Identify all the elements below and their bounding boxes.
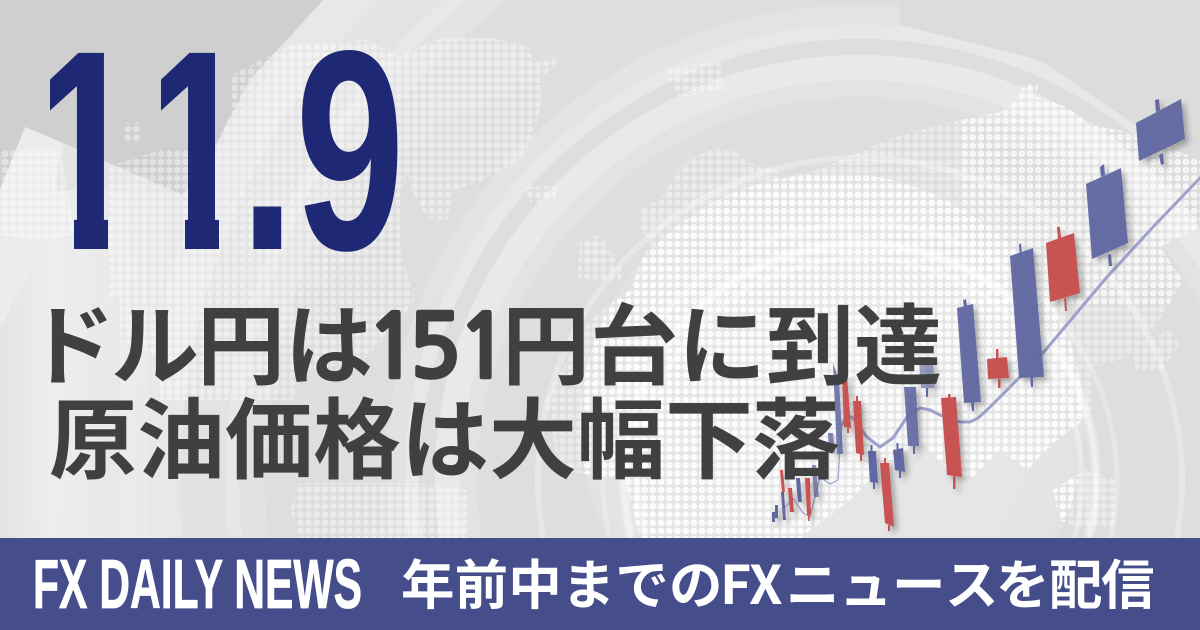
- footer bar: [0, 538, 1200, 630]
- brand label: FX DAILY NEWS: [33, 545, 362, 623]
- blue candles: [772, 99, 1185, 522]
- footer tagline: 年前中までのFXニュースを配信: [401, 543, 1154, 620]
- headline line 1: 151: [366, 304, 510, 392]
- dotted world map: [0, 38, 1200, 538]
- red candles: [780, 227, 1080, 531]
- globe highlight: [718, 312, 944, 538]
- headline line 2: 原油価格は大幅下落: [49, 370, 840, 498]
- main headline: [27, 276, 942, 498]
- chart: candlesticks with trend line: [772, 99, 1200, 531]
- headline line 1: 円台に到達: [502, 276, 942, 404]
- trend line: [783, 178, 1200, 517]
- outer arcs: [160, 0, 1200, 538]
- date heading: 11.9: [31, 0, 405, 310]
- concentric rings: [538, 158, 1182, 538]
- headline line 1: ドル円は: [27, 276, 373, 404]
